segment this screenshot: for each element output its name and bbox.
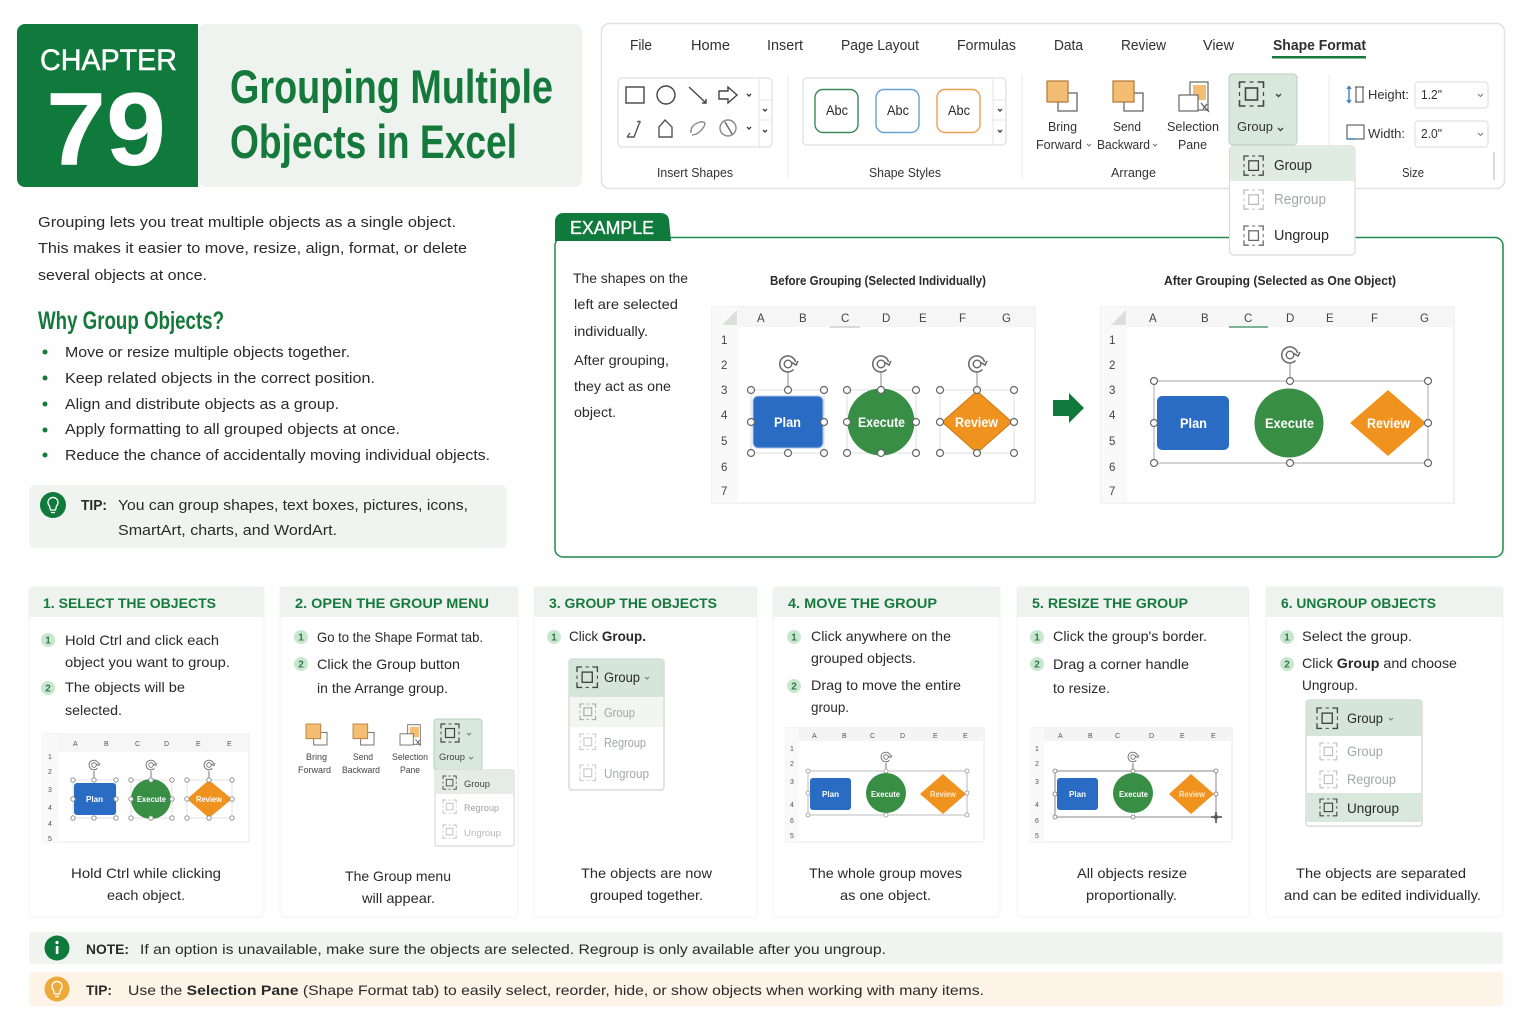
bullet list: Apply formatting to all grouped objects at once. xyxy=(65,421,400,438)
step 5 mini sheet: A xyxy=(1058,733,1063,740)
step 4 mini sheet: C xyxy=(870,733,875,740)
step 2 caption xyxy=(345,868,451,906)
step 5 mini sheet: 6 xyxy=(1035,818,1039,825)
step 1 caption: each object. xyxy=(107,887,185,903)
step 5 instructions: Click the group's border. xyxy=(1053,628,1207,644)
intro text: This makes it easier to move, resize, align, format, or delete xyxy=(38,240,467,257)
step 3 group menu: Group xyxy=(604,706,635,720)
group dropdown menu: Ungroup xyxy=(1274,228,1329,244)
grouped selection xyxy=(1150,347,1432,466)
step 5 mini sheet: 3 xyxy=(1035,779,1039,786)
step 2 caption: will appear. xyxy=(361,890,435,906)
arrow: before to after xyxy=(1053,393,1084,423)
example tab xyxy=(555,213,671,241)
intro text: several objects at once. xyxy=(38,267,207,284)
step 1 mini sheet: 1 xyxy=(48,754,52,761)
shape: plan: Plan xyxy=(774,415,801,430)
step 4 instructions: grouped objects. xyxy=(811,650,916,666)
step 2 mini ribbon: Ungroup xyxy=(464,828,501,839)
step 4 mini sheet: 1 xyxy=(790,746,794,753)
size controls: Height: xyxy=(1368,88,1409,102)
step 4 caption: The whole group moves xyxy=(809,865,962,881)
step 5 instructions: 1 xyxy=(1034,632,1040,644)
panel: step 6 xyxy=(1266,587,1503,917)
step 1 instructions xyxy=(41,632,230,718)
sheet: after grouping: 7 xyxy=(1109,486,1115,498)
step 2 mini ribbon: Bring xyxy=(306,752,327,763)
step 4 instructions: group. xyxy=(811,699,849,715)
icon: light bulb xyxy=(44,976,70,1002)
icon: info xyxy=(44,936,70,960)
size controls xyxy=(1347,82,1494,180)
group button: Group xyxy=(1237,120,1273,134)
group button xyxy=(1229,74,1297,145)
step 2 instructions: Click the Group button xyxy=(317,656,460,672)
step 5 mini sheet: Execute xyxy=(1119,790,1149,799)
panel: step 1: 1. SELECT THE OBJECTS xyxy=(43,596,216,611)
size controls: 1.2" xyxy=(1421,88,1442,102)
step 4 mini sheet: D xyxy=(900,733,905,740)
step 1 mini sheet: 3 xyxy=(48,787,52,794)
note bar: NOTE: xyxy=(86,941,129,957)
sheet: before grouping xyxy=(712,307,1035,503)
shape: execute: Execute xyxy=(858,415,905,430)
panel: step 6: 6. UNGROUP OBJECTS xyxy=(1281,596,1436,611)
step 5 caption: All objects resize xyxy=(1077,865,1187,881)
arrange group xyxy=(1036,74,1297,180)
step 2 mini ribbon: Group xyxy=(439,752,465,763)
step 6 instructions: 2 xyxy=(1284,660,1290,670)
sheet: after grouping xyxy=(1101,307,1454,503)
heading: after grouping: After Grouping (Selected as One Object) xyxy=(1164,274,1396,288)
sheet: before grouping: 7 xyxy=(721,486,727,498)
step 1 instructions: 2 xyxy=(45,684,51,694)
step 1 mini sheet: 4 xyxy=(48,821,52,828)
chapter header banner xyxy=(17,24,582,188)
step 3 group menu: Regroup xyxy=(604,736,646,750)
step 2 mini ribbon xyxy=(298,719,514,846)
ribbon tabs: Formulas xyxy=(957,38,1016,54)
step 1 mini sheet: Plan xyxy=(86,795,103,804)
tip box: SmartArt, charts, and WordArt. xyxy=(118,522,337,539)
step 1 instructions: 1 xyxy=(45,636,51,646)
sheet: after grouping: A xyxy=(1149,313,1157,325)
tip bar xyxy=(29,972,1503,1006)
step 3 instructions: Click Group. xyxy=(569,628,646,644)
tip bar: TIP: xyxy=(86,982,112,998)
step 4 mini sheet: A xyxy=(812,733,817,740)
arrange group: Selection xyxy=(1167,120,1219,134)
step 2 mini ribbon: Selection xyxy=(392,752,428,763)
bullet list: Align and distribute objects as a group. xyxy=(65,396,339,413)
step 1 instructions: The objects will be xyxy=(65,679,185,695)
panel: step 2: 2. OPEN THE GROUP MENU xyxy=(295,596,489,611)
step 4 mini sheet: Review xyxy=(930,790,957,799)
step 4 caption: as one object. xyxy=(840,887,931,903)
step 6 instructions xyxy=(1280,628,1457,693)
example description: The shapes on the xyxy=(573,270,688,286)
panel: step 3 xyxy=(534,587,757,917)
example description: individually. xyxy=(574,323,648,339)
step 3 caption: The objects are now xyxy=(581,865,713,881)
bullet list xyxy=(42,344,490,464)
title: Grouping Multiple xyxy=(230,60,553,113)
panel: step 4 xyxy=(773,587,1000,917)
note bar: If an option is unavailable, make sure the objects are selected. Regroup is only available after you ungroup. xyxy=(140,941,886,957)
step 3 group menu: Group xyxy=(604,670,640,685)
step 4 instructions: 2 xyxy=(791,682,797,692)
ribbon tabs xyxy=(630,38,1366,58)
arrange group: Arrange xyxy=(1111,166,1156,180)
ribbon tabs: Page Layout xyxy=(841,38,919,54)
step 3 group menu xyxy=(569,659,664,790)
panel: step 2 xyxy=(280,587,518,917)
shape styles gallery: Abc xyxy=(887,103,909,118)
label: shape styles: Shape Styles xyxy=(869,166,941,180)
step 1 instructions: Hold Ctrl and click each xyxy=(65,632,219,648)
step 5 mini sheet: 2 xyxy=(1035,761,1039,768)
size controls: 2.0" xyxy=(1421,127,1442,141)
size controls: Width: xyxy=(1368,127,1405,141)
step 5 mini sheet: C xyxy=(1115,733,1120,740)
sheet: after grouping: 4 xyxy=(1109,410,1116,422)
step 1 instructions: selected. xyxy=(65,702,122,718)
step 6 group menu xyxy=(1306,700,1422,826)
sheet: before grouping: 3 xyxy=(721,385,727,397)
group dropdown menu: Group xyxy=(1274,158,1312,174)
ribbon tabs: Home xyxy=(691,38,730,54)
tip box xyxy=(29,485,507,548)
panel: step 5: 5. RESIZE THE GROUP xyxy=(1032,596,1188,611)
sheet: before grouping: 5 xyxy=(721,436,727,448)
shape styles gallery: Abc xyxy=(826,103,848,118)
step 5 instructions: to resize. xyxy=(1053,680,1110,696)
arrange group: Send xyxy=(1113,120,1141,134)
step 6 instructions: Select the group. xyxy=(1302,628,1412,644)
example description: After grouping, xyxy=(574,352,669,368)
step 6 group menu: Ungroup xyxy=(1347,801,1399,816)
tip box: TIP: xyxy=(81,497,107,514)
example tab: EXAMPLE xyxy=(570,218,654,238)
step 5 mini sheet: E xyxy=(1180,733,1185,740)
step 4 mini sheet: Execute xyxy=(871,790,901,799)
step 1 mini sheet: A xyxy=(73,741,78,748)
step 2 caption: The Group menu xyxy=(345,868,451,884)
sheet: before grouping: A xyxy=(757,313,765,325)
step 6 instructions: Ungroup. xyxy=(1302,677,1358,693)
step 4 instructions: 1 xyxy=(791,632,797,644)
example description: object. xyxy=(574,404,616,420)
step 2 instructions xyxy=(294,629,483,696)
shape styles gallery: Abc xyxy=(948,103,970,118)
label: insert shapes: Insert Shapes xyxy=(657,166,733,180)
group dropdown menu: Regroup xyxy=(1274,192,1326,208)
step 2 mini ribbon: Group xyxy=(464,779,490,790)
step 5 mini sheet: 4 xyxy=(1035,802,1039,809)
step 5 instructions: 2 xyxy=(1034,660,1040,670)
step 1 mini sheet: E xyxy=(227,741,232,748)
step 1 mini sheet: 4 xyxy=(48,805,52,812)
tip box: You can group shapes, text boxes, pictures, icons, xyxy=(118,497,468,514)
shape: review xyxy=(936,356,1018,456)
step 4 mini sheet: 2 xyxy=(790,761,794,768)
step 4 mini sheet: 4 xyxy=(790,802,794,809)
step 1 caption: Hold Ctrl while clicking xyxy=(71,865,221,881)
sheet: after grouping: B xyxy=(1201,313,1209,325)
step 2 mini ribbon: Forward xyxy=(298,765,331,776)
sheet: after grouping: 6 xyxy=(1109,462,1115,474)
step 3 group menu: Ungroup xyxy=(604,767,649,781)
ribbon tabs: Insert xyxy=(767,38,803,54)
sheet: before grouping: 1 xyxy=(721,335,727,347)
tip bar: Use the Selection Pane (Shape Format tab) to easily select, reorder, hide, or show objects when working with many items. xyxy=(128,982,984,998)
step 1 mini sheet: D xyxy=(164,741,169,748)
step 1 instructions: object you want to group. xyxy=(65,654,230,670)
sheet: after grouping: 3 xyxy=(1109,385,1115,397)
sheet: after grouping: 5 xyxy=(1109,436,1115,448)
step 4 instructions: Drag to move the entire xyxy=(811,677,961,693)
sheet: before grouping: 4 xyxy=(721,410,728,422)
sheet: after grouping: E xyxy=(1326,313,1334,325)
step 4 mini sheet xyxy=(786,728,984,842)
step 1 mini sheet: B xyxy=(104,741,109,748)
shape styles gallery xyxy=(803,78,1006,180)
sheet: before grouping: C xyxy=(841,313,849,325)
sheet: after grouping: G xyxy=(1420,313,1429,325)
panel: step 5 xyxy=(1017,587,1249,917)
arrange group: Pane xyxy=(1178,138,1207,152)
group dropdown menu xyxy=(1230,146,1355,255)
step 3 instructions: 1 xyxy=(551,632,557,644)
step 5 mini sheet: B xyxy=(1088,733,1093,740)
step 2 mini ribbon: Backward xyxy=(342,765,380,776)
step 2 instructions: in the Arrange group. xyxy=(317,680,448,696)
step 2 mini ribbon: Pane xyxy=(400,765,420,776)
step 4 mini sheet: Plan xyxy=(822,790,839,799)
chapter number: 79 xyxy=(46,72,166,188)
chapter label: CHAPTER xyxy=(40,44,177,77)
step 4 caption xyxy=(809,865,962,903)
step 5 mini sheet: Plan xyxy=(1069,790,1086,799)
step 6 caption: The objects are separated xyxy=(1296,865,1466,881)
example description: left are selected xyxy=(574,296,678,312)
title: Objects in Excel xyxy=(230,115,517,168)
step 5 caption xyxy=(1077,865,1187,903)
sheet: before grouping: 2 xyxy=(721,360,727,372)
step 4 mini sheet: E xyxy=(963,733,968,740)
step 4 mini sheet: 3 xyxy=(790,779,794,786)
step 5 instructions xyxy=(1030,628,1207,696)
shape: plan xyxy=(748,356,828,456)
panel: example xyxy=(555,213,1503,557)
sheet: after grouping: 2 xyxy=(1109,360,1115,372)
step 5 mini sheet: 5 xyxy=(1035,833,1039,840)
insert shapes gallery xyxy=(618,78,772,180)
sheet: before grouping: G xyxy=(1002,313,1011,325)
step 4 mini sheet: E xyxy=(933,733,938,740)
bullet list: Reduce the chance of accidentally moving individual objects. xyxy=(65,447,490,464)
title xyxy=(230,60,553,168)
sheet: before grouping: 6 xyxy=(721,462,727,474)
arrange group: Bring xyxy=(1048,120,1077,134)
step 1 mini sheet: E xyxy=(196,741,201,748)
step 4 mini sheet: 5 xyxy=(790,833,794,840)
step 2 instructions: Go to the Shape Format tab. xyxy=(317,629,483,645)
ribbon tabs: Review xyxy=(1121,38,1166,54)
step 2 instructions: 1 xyxy=(298,632,304,644)
step 4 mini sheet: B xyxy=(842,733,847,740)
intro text xyxy=(38,214,467,284)
sheet: before grouping: F xyxy=(959,313,966,325)
step 6 instructions: 1 xyxy=(1284,632,1290,644)
step 4 instructions: Click anywhere on the xyxy=(811,628,951,644)
step 1 mini sheet xyxy=(43,734,249,843)
ribbon tabs: Shape Format xyxy=(1273,38,1366,54)
step 1 mini sheet: Execute xyxy=(137,795,167,804)
sheet: after grouping: F xyxy=(1371,313,1378,325)
heading: why group objects: Why Group Objects? xyxy=(38,307,224,335)
panel: step 4: 4. MOVE THE GROUP xyxy=(788,596,937,611)
step 6 group menu: Group xyxy=(1347,744,1383,759)
grouped selection: Review xyxy=(1367,416,1410,431)
step 3 caption xyxy=(581,865,713,903)
step 2 mini ribbon: Regroup xyxy=(464,803,499,814)
size controls: Size xyxy=(1402,166,1424,180)
example description xyxy=(573,270,688,420)
sheet: before grouping: B xyxy=(799,313,807,325)
step 6 group menu: Regroup xyxy=(1347,772,1396,787)
panel: step 1 xyxy=(29,587,264,917)
shape: execute xyxy=(844,356,920,456)
step 4 instructions xyxy=(787,628,961,715)
grouped selection: Plan xyxy=(1180,416,1207,431)
sheet: before grouping: D xyxy=(882,313,890,325)
panel: excel ribbon xyxy=(602,24,1504,188)
panel: step 3: 3. GROUP THE OBJECTS xyxy=(549,596,717,611)
ribbon tabs: Data xyxy=(1054,38,1084,54)
bullet list: Keep related objects in the correct position. xyxy=(65,370,375,387)
step 4 mini sheet: 6 xyxy=(790,818,794,825)
step 2 instructions: 2 xyxy=(298,660,304,670)
step 1 mini sheet: Review xyxy=(196,795,223,804)
step 6 caption xyxy=(1284,865,1481,903)
step 5 caption: proportionally. xyxy=(1086,887,1177,903)
grouped selection: Execute xyxy=(1265,416,1314,431)
arrange group: Forward xyxy=(1036,138,1082,152)
heading: before grouping: Before Grouping (Selected Individually) xyxy=(770,274,986,288)
step 5 instructions: Drag a corner handle xyxy=(1053,656,1189,672)
intro text: Grouping lets you treat multiple objects as a single object. xyxy=(38,214,456,231)
step 1 mini sheet: C xyxy=(135,741,140,748)
step 1 mini sheet: 2 xyxy=(48,769,52,776)
example description: they act as one xyxy=(574,378,671,394)
ribbon tabs: File xyxy=(630,38,652,54)
sheet: after grouping: 1 xyxy=(1109,335,1115,347)
step 3 caption: grouped together. xyxy=(590,887,703,903)
sheet: before grouping: E xyxy=(919,313,927,325)
arrange group: Backward xyxy=(1097,138,1150,152)
sheet: after grouping: D xyxy=(1286,313,1294,325)
sheet: after grouping: C xyxy=(1244,313,1252,325)
step 2 mini ribbon: Send xyxy=(353,752,373,763)
shape: review: Review xyxy=(955,415,998,430)
step 5 mini sheet: D xyxy=(1149,733,1154,740)
step 5 mini sheet: E xyxy=(1211,733,1216,740)
bullet list: Move or resize multiple objects together. xyxy=(65,344,350,361)
icon: resize cursor xyxy=(1211,812,1222,823)
icon: light bulb xyxy=(40,492,66,518)
step 6 group menu: Group xyxy=(1347,711,1383,726)
step 6 instructions: Click Group and choose xyxy=(1302,655,1457,671)
step 1 mini sheet: 5 xyxy=(48,836,52,843)
step 5 mini sheet: 1 xyxy=(1035,746,1039,753)
step 5 mini sheet xyxy=(1031,728,1232,842)
step 6 caption: and can be edited individually. xyxy=(1284,887,1481,903)
ribbon tabs: View xyxy=(1203,38,1235,54)
note bar xyxy=(29,932,1503,964)
step 1 caption xyxy=(71,865,221,903)
step 5 mini sheet: Review xyxy=(1179,790,1206,799)
